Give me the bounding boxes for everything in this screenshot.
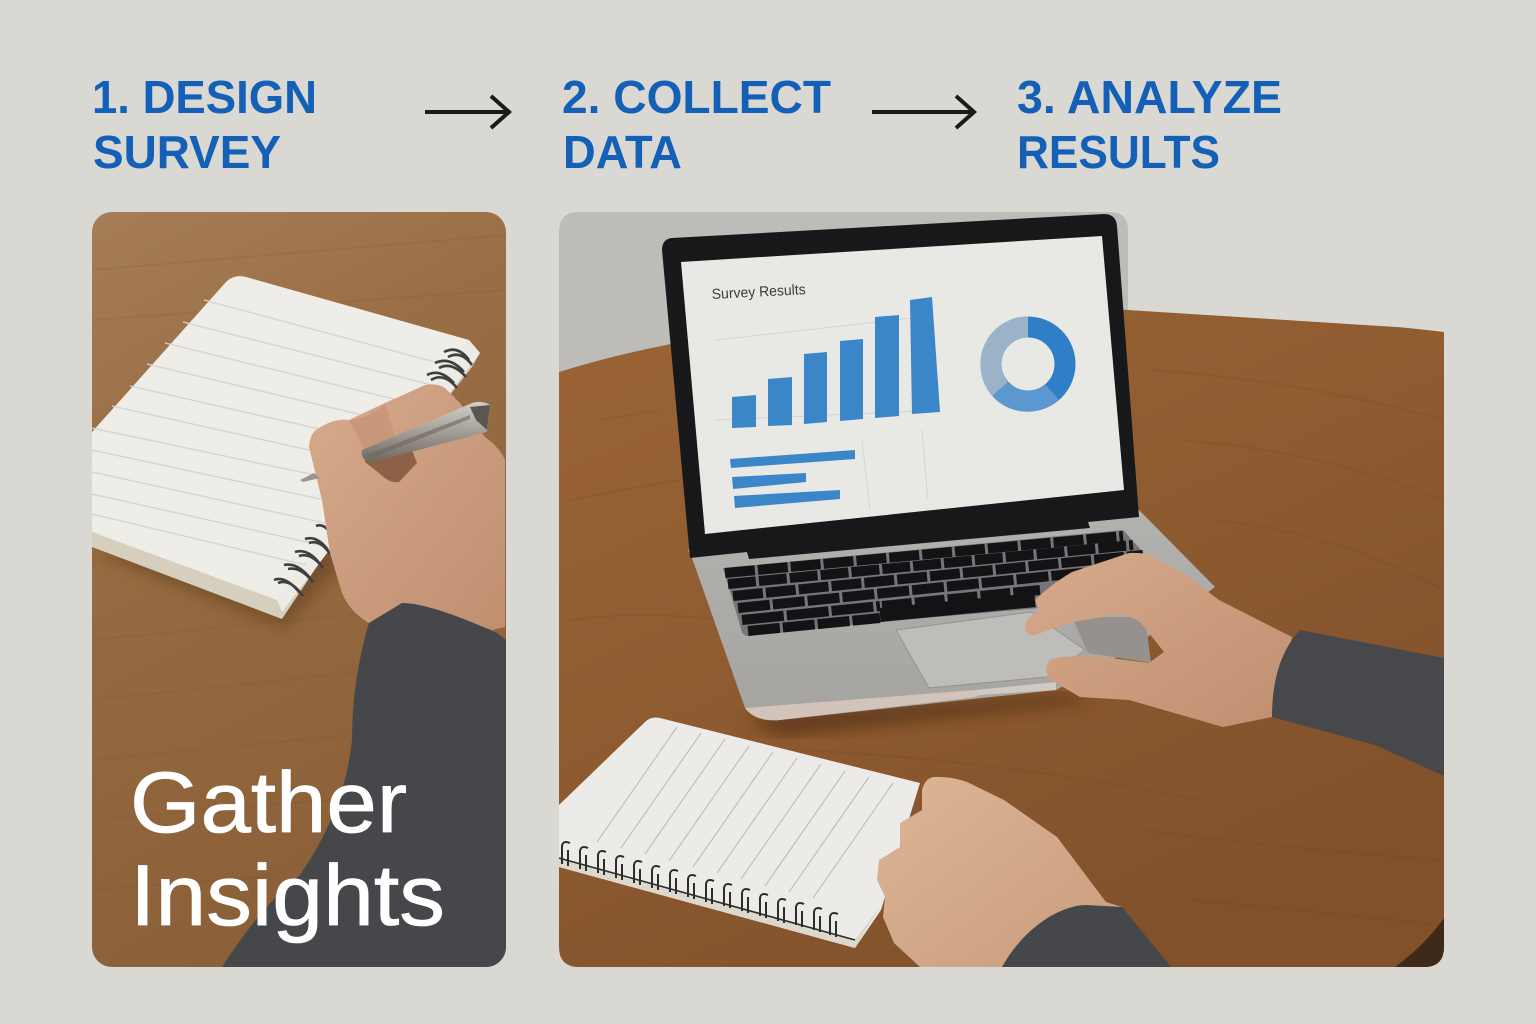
heading: step 1 design survey: 1. DESIGN: [92, 71, 317, 123]
sleeve: [222, 603, 506, 967]
donut chart: [991, 327, 1065, 401]
laptop shadow: [745, 695, 1100, 735]
panel: photo of laptop on round table: [559, 212, 1444, 967]
heading: step 1 design survey: SURVEY: [93, 126, 281, 178]
hand holding pen: [300, 384, 505, 630]
trackpad: [896, 612, 1085, 688]
sleeve on right arm: [1272, 630, 1444, 776]
caption: gather insights: [130, 755, 445, 944]
wall: [559, 212, 1128, 372]
arrow: collect to analyze: [872, 96, 974, 128]
heading: step 1 design survey: [92, 71, 317, 178]
laptop lid: [662, 214, 1139, 559]
heading: step 3 analyze results: RESULTS: [1017, 126, 1220, 178]
screen title: Survey Results: [711, 282, 806, 303]
heading: step 3 analyze results: [1017, 71, 1282, 178]
notebook shadow: [101, 550, 337, 630]
caption: gather insights: Gather: [130, 755, 407, 851]
heading: step 3 analyze results: 3. ANALYZE: [1017, 71, 1282, 123]
heading: step 2 collect data: DATA: [563, 126, 682, 178]
arrow: design to collect: [425, 96, 509, 128]
lower sleeve: [1002, 905, 1171, 967]
horizontal bars: [730, 450, 855, 508]
keyboard: [723, 530, 1143, 636]
lower hand: [877, 777, 1122, 967]
caption: gather insights: Insights: [130, 848, 445, 944]
hand on trackpad: [1025, 553, 1292, 727]
heading: step 2 collect data: 2. COLLECT: [562, 71, 831, 123]
heading: step 2 collect data: [562, 71, 831, 178]
laptop base: [688, 510, 1215, 720]
panel: photo of hand writing in notebook: [92, 212, 506, 967]
lower notebook: [559, 718, 920, 948]
table: [559, 309, 1444, 967]
spiral binding: [274, 350, 472, 596]
notebook: [92, 276, 480, 619]
spiral: [562, 842, 838, 937]
bar chart: [732, 297, 940, 428]
